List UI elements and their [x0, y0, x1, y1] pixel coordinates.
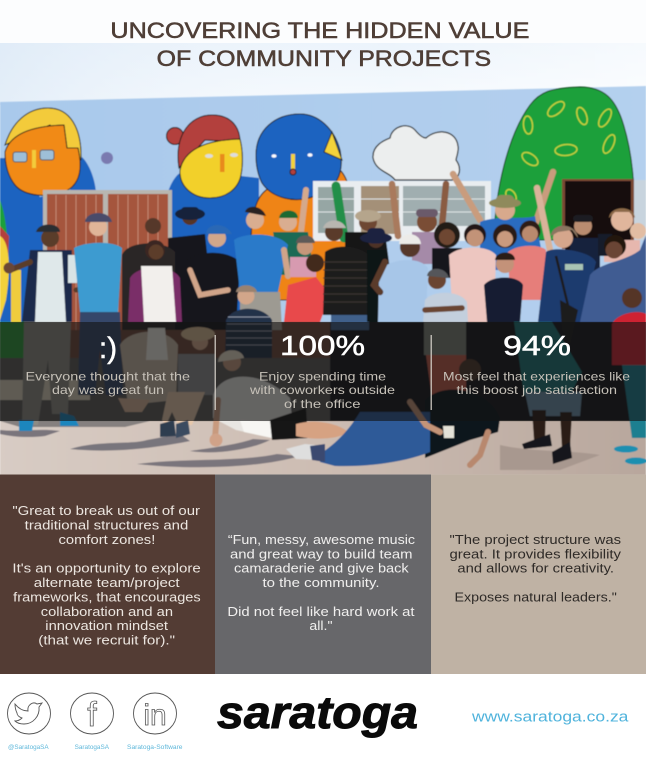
- saratoga logo: saratoga: [217, 687, 418, 738]
- stat: 100 percent: with coworkers outside: [249, 383, 395, 397]
- man on the far left: [4, 224, 90, 431]
- woman in navy t-shirt: [538, 226, 596, 345]
- woman in denim hoodie: [580, 235, 646, 322]
- social handles: Saratoga-Software: [127, 745, 183, 751]
- divider lines: [215, 335, 432, 410]
- mural: blue face on orange body: [101, 114, 352, 300]
- panel: quote brown: frameworks, that encourages: [13, 590, 201, 604]
- title: UNCOVERING THE HIDDEN VALUE: [110, 18, 529, 43]
- icon: facebook: [70, 693, 114, 734]
- stat: 100 percent: of the office: [284, 397, 361, 411]
- woman in light blue shirt: [374, 234, 428, 322]
- social handles: SaratogaSA: [75, 745, 109, 751]
- social handles: [8, 745, 183, 751]
- stat: 100 percent: Enjoy spending time: [259, 370, 386, 384]
- panel: quote grey: all.": [309, 619, 332, 633]
- team photo in front of mural: [0, 86, 646, 475]
- man in bright blue shirt: [234, 235, 288, 330]
- dark doorway: [562, 179, 646, 251]
- panel: quote grey: Did not feel like hard work at: [227, 605, 415, 619]
- panel: quote brown: (that we recruit for).": [38, 633, 175, 647]
- panel: quote brown: innovation mindset: [45, 619, 169, 633]
- stat: 94 percent: this boost job satisfaction: [456, 383, 617, 397]
- boy with cap and plaid shirt: [423, 269, 468, 398]
- paved ground: [0, 421, 646, 475]
- panel: quote beige: "The project structure was: [450, 533, 621, 547]
- title: OF COMMUNITY PROJECTS: [157, 46, 491, 71]
- panel: quote grey: [215, 474, 431, 674]
- boy in navy with glasses: [484, 252, 523, 322]
- icon: twitter: [8, 693, 50, 734]
- seated woman with straw hat: [160, 327, 215, 438]
- panel: quote grey: and great way to build team: [230, 547, 412, 561]
- social handles: @SaratogaSA: [8, 745, 49, 751]
- panel: quote beige: [431, 474, 646, 674]
- dark stats band: [0, 322, 646, 421]
- stat: 94 percent: 94%: [503, 330, 571, 361]
- back row people: [122, 195, 646, 330]
- panel: quote brown: It's an opportunity to explore: [12, 561, 201, 575]
- woman in pink shirt: [449, 224, 496, 322]
- title: [110, 18, 529, 71]
- stat: smile: day was great fun: [52, 383, 164, 397]
- panel: quote brown: traditional structures and: [25, 518, 188, 532]
- woman with grey cap and child in red: [284, 236, 330, 322]
- back row arms raised: [300, 172, 553, 250]
- seated man in tank top: [118, 328, 178, 412]
- panel: quote grey: “Fun, messy, awesome music: [228, 533, 415, 547]
- panel: quote grey: to the community.: [262, 576, 380, 590]
- mural: white cloud: [373, 126, 459, 180]
- man in blue t-shirt: [74, 213, 123, 395]
- boy in teal shirt: [514, 322, 582, 464]
- panel: quote beige: Exposes natural leaders.": [454, 590, 617, 604]
- panel: quote brown: collaboration and an: [41, 605, 173, 619]
- person in dark hat: [360, 228, 392, 322]
- stat: 100 percent: [249, 330, 395, 411]
- mural fragment left: [0, 200, 24, 358]
- stat: smile: :): [99, 332, 117, 365]
- sky background: [0, 0, 646, 105]
- window: [313, 181, 491, 241]
- icon: facebook: f: [87, 696, 97, 734]
- panel: quote beige: and allows for creativity.: [457, 561, 614, 575]
- reclining woman in white: [210, 350, 348, 446]
- panel: quote brown: [0, 474, 215, 674]
- mural: yellow face with red hat: [166, 115, 259, 330]
- crouching man with tan cap: [225, 285, 272, 358]
- website url: www.saratoga.co.za: [471, 708, 629, 726]
- icon: linkedin: in: [143, 699, 167, 732]
- panel: quote brown: comfort zones!: [58, 533, 155, 547]
- stat: 100 percent: 100%: [280, 330, 365, 361]
- man in black shirt with blue cap: [187, 225, 240, 330]
- stat: 94 percent: Most feel that experiences like: [443, 370, 630, 384]
- icon: linkedin: [134, 693, 176, 734]
- stat: 94 percent: [443, 330, 630, 397]
- stat: smile: Everyone thought that the: [26, 370, 190, 384]
- boy in red shirt: [612, 288, 646, 464]
- red-brown door: [43, 190, 172, 330]
- woman in black striped sweater: [323, 220, 372, 330]
- building wall: [0, 86, 646, 330]
- woman in coral shirt: [508, 220, 546, 300]
- woman in #FRESH shirt: [128, 240, 182, 322]
- mural: orange face: [0, 108, 96, 330]
- mural: green tree: [494, 87, 634, 240]
- panel: quote beige: great. It provides flexibility: [450, 547, 622, 561]
- stat: smile: [26, 332, 190, 397]
- panel: quote brown: alternate team/project: [34, 576, 180, 590]
- shaded area behind the seated row: [0, 322, 646, 421]
- panel: quote grey: camaraderie and give back: [234, 561, 410, 575]
- reclining man in jeans: [286, 359, 500, 466]
- panel: quote brown: "Great to break us out of our: [12, 504, 200, 518]
